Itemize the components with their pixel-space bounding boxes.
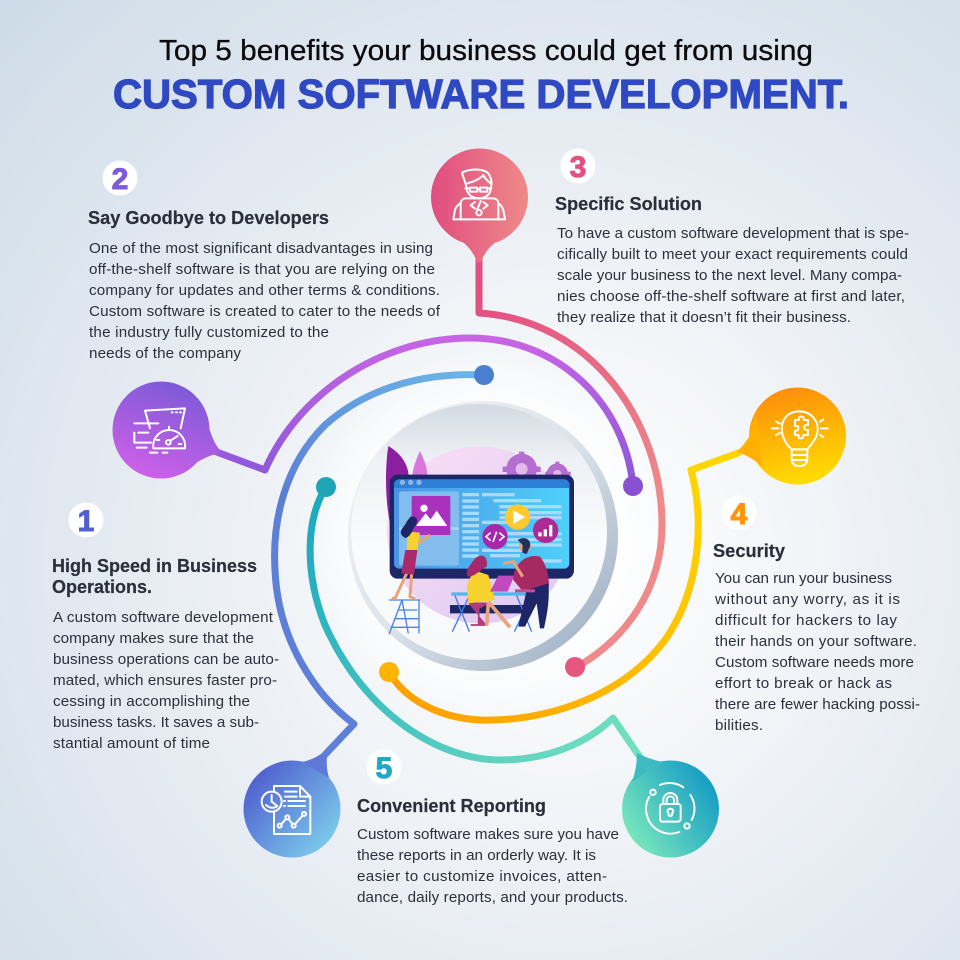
section 2: Say Goodbye to Developers <box>88 160 441 362</box>
ladder and woman <box>389 516 430 634</box>
badge 3: 3 <box>570 151 586 184</box>
badge 2 <box>102 160 138 196</box>
section 4: Security: there are fewer hacking possi- <box>715 696 920 713</box>
icon bubble: speed <box>112 382 219 478</box>
section 1: High Speed in Business Operations: High Speed in Business <box>52 555 257 576</box>
section 5: Convenient Reporting: Custom software makes sure you have <box>357 826 619 843</box>
section 2: Say Goodbye to Developers: One of the most significant disadvantages in using <box>89 240 433 257</box>
section 4: Security: You can run your business <box>715 570 892 587</box>
section 1: High Speed in Business Operations: business operations can be auto- <box>53 651 279 668</box>
section 2: Say Goodbye to Developers: Say Goodbye to Developers <box>88 207 329 228</box>
section 3: Specific Solution <box>555 148 909 326</box>
icon bubble: light bulb puzzle <box>737 388 846 484</box>
arc: yellow spiral to idea <box>379 452 741 720</box>
section 3: Specific Solution: they realize that it doesn’t fit their business. <box>557 309 851 326</box>
section 1: High Speed in Business Operations: cessing in accomplishing the <box>53 693 250 710</box>
central illustration: team building software <box>386 446 574 634</box>
section 3: Specific Solution: nies choose off-the-shelf software at first and later, <box>557 288 905 305</box>
section 5: Convenient Reporting: dance, daily reports, and your products. <box>357 889 628 906</box>
badge 2: 2 <box>112 163 128 196</box>
central disc <box>298 351 668 721</box>
section 2: Say Goodbye to Developers: off-the-shelf software is that you are relying on the <box>89 261 435 278</box>
section 4: Security <box>713 496 920 734</box>
badge 4 <box>722 496 756 531</box>
section 1: High Speed in Business Operations: Operations. <box>52 576 152 597</box>
section 4: Security: without any worry, as it is <box>714 591 900 608</box>
badge 5: 5 <box>376 752 392 785</box>
section 3: Specific Solution: To have a custom software development that is spe- <box>557 225 909 242</box>
section 2: Say Goodbye to Developers: Custom software is created to cater to the needs of <box>89 303 441 320</box>
section 2: Say Goodbye to Developers: company for updates and other terms & conditions. <box>89 282 440 299</box>
section 4: Security: Security <box>713 540 786 561</box>
section 1: High Speed in Business Operations: mated, which ensures faster pro- <box>53 672 277 689</box>
badge 3 <box>560 148 596 184</box>
section 1: High Speed in Business Operations: stantial amount of time <box>53 735 210 752</box>
section 5: Convenient Reporting: Convenient Reporting <box>357 795 546 816</box>
section 4: Security: difficult for hackers to lay <box>715 612 897 629</box>
section 4: Security: bilities. <box>715 717 763 734</box>
arc: teal spiral to security <box>310 477 642 760</box>
section 3: Specific Solution: Specific Solution <box>555 193 702 214</box>
section 4: Security: their hands on your software. <box>715 633 917 650</box>
section 5: Convenient Reporting <box>357 750 628 906</box>
icon bubble: report <box>244 754 340 858</box>
icon bubble: lock <box>622 753 719 858</box>
section 5: Convenient Reporting: these reports in an orderly way. It is <box>357 847 596 864</box>
desk, seated woman and standing man <box>450 538 549 632</box>
badge 1: 1 <box>78 505 94 538</box>
section 1: High Speed in Business Operations: business tasks. It saves a sub- <box>53 714 259 731</box>
badge 5 <box>366 750 402 785</box>
arc: blue spiral to reporting <box>275 365 494 760</box>
badge 4: 4 <box>731 498 748 531</box>
section 3: Specific Solution: scale your business to the next level. Many compa- <box>557 267 902 284</box>
section 2: Say Goodbye to Developers: needs of the company <box>89 345 241 362</box>
icon bubble: developer <box>431 148 528 262</box>
section 4: Security: effort to break or hack as <box>715 675 892 692</box>
arc: pink spiral to developer <box>479 258 662 677</box>
badge 1 <box>68 502 104 538</box>
title: CUSTOM SOFTWARE DEVELOPMENT. <box>113 71 849 117</box>
section 1: High Speed in Business Operations: A custom software development <box>53 609 274 626</box>
section 5: Convenient Reporting: easier to customize invoices, atten- <box>357 868 607 885</box>
section 1: High Speed in Business Operations: company makes sure that the <box>53 630 254 647</box>
title: Top 5 benefits your business could get from using <box>159 35 813 67</box>
section 2: Say Goodbye to Developers: the industry fully customized to the <box>89 324 329 341</box>
section 1: High Speed in Business Operations <box>52 502 279 752</box>
section 4: Security: Custom software needs more <box>715 654 914 671</box>
arc: purple spiral to speed <box>214 338 643 496</box>
title <box>113 35 849 117</box>
section 3: Specific Solution: cifically built to meet your exact requirements could <box>557 246 908 263</box>
